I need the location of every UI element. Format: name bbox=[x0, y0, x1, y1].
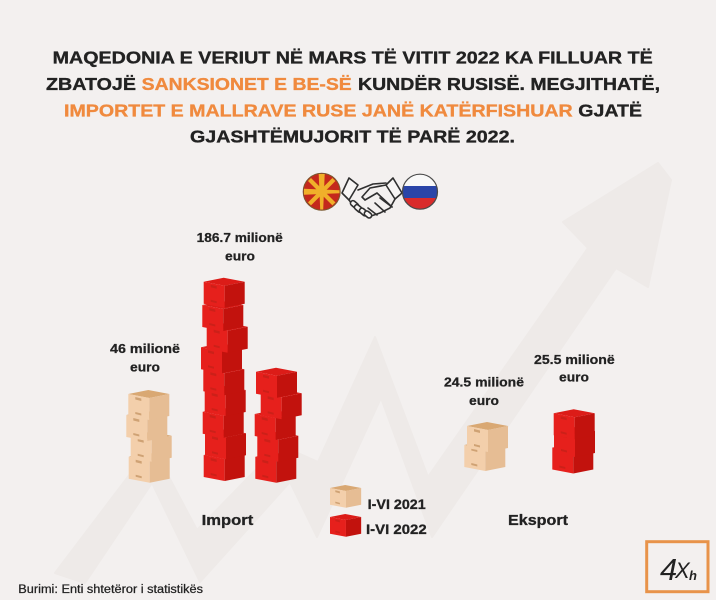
label: 46 milionë euro: 46 milionë bbox=[110, 342, 180, 356]
title: IMPORTET E MALLRAVE RUSE JANË KATËRFISHUAR bbox=[64, 100, 573, 120]
stack: import 2022 short boxes bbox=[255, 368, 302, 483]
icon: Russia flag bbox=[402, 174, 438, 210]
label: 186.7 milionë euro bbox=[197, 231, 283, 264]
title: SANKSIONET E BE-SË bbox=[142, 74, 352, 94]
label: Import: Import bbox=[202, 512, 253, 529]
title: KUNDËR RUSISË. MEGJITHATË, bbox=[358, 74, 660, 94]
title: MAQEDONIA E VERIUT NË MARS TË VITIT 2022 KA FILLUAR TË bbox=[53, 47, 653, 67]
stack: export 2021 boxes bbox=[464, 422, 508, 471]
icon: handshake bbox=[342, 178, 402, 219]
title: GJASHTËMUJORIT TË PARË 2022. bbox=[190, 127, 515, 147]
legend item: I-VI 2021: I-VI 2021 bbox=[368, 497, 426, 512]
label: 24.5 milionë euro: euro bbox=[469, 394, 499, 408]
stack: import 2022 tall boxes bbox=[201, 278, 248, 481]
logo bbox=[647, 542, 708, 592]
stack: import 2021 boxes bbox=[126, 390, 172, 483]
legend item: I-VI 2022: I-VI 2022 bbox=[366, 522, 427, 537]
icon: North Macedonia flag bbox=[303, 173, 340, 210]
label: 24.5 milionë euro bbox=[444, 376, 524, 408]
label: 46 milionë euro: euro bbox=[130, 361, 160, 375]
label: Eksport: Eksport bbox=[508, 512, 568, 529]
source note: Burimi: Enti shtetëror i statistikës bbox=[18, 584, 203, 596]
label: 186.7 milionë euro: euro bbox=[225, 250, 255, 264]
title: GJATË bbox=[578, 100, 642, 120]
background rising arrow bbox=[55, 163, 671, 583]
stack: export 2022 boxes bbox=[552, 409, 595, 474]
logo: 4 bbox=[660, 552, 677, 587]
legend bbox=[330, 485, 427, 537]
logo: h bbox=[689, 568, 697, 583]
title bbox=[46, 47, 660, 147]
label: 25.5 milionë euro: 25.5 milionë bbox=[534, 353, 615, 367]
logo: X bbox=[674, 558, 691, 583]
label: 186.7 milionë euro: 186.7 milionë bbox=[197, 231, 283, 245]
label: 25.5 milionë euro: euro bbox=[559, 371, 589, 385]
label: 24.5 milionë euro: 24.5 milionë bbox=[444, 376, 524, 390]
label: 25.5 milionë euro bbox=[534, 353, 615, 385]
label: 46 milionë euro bbox=[110, 342, 180, 375]
title: ZBATOJË bbox=[46, 74, 136, 94]
